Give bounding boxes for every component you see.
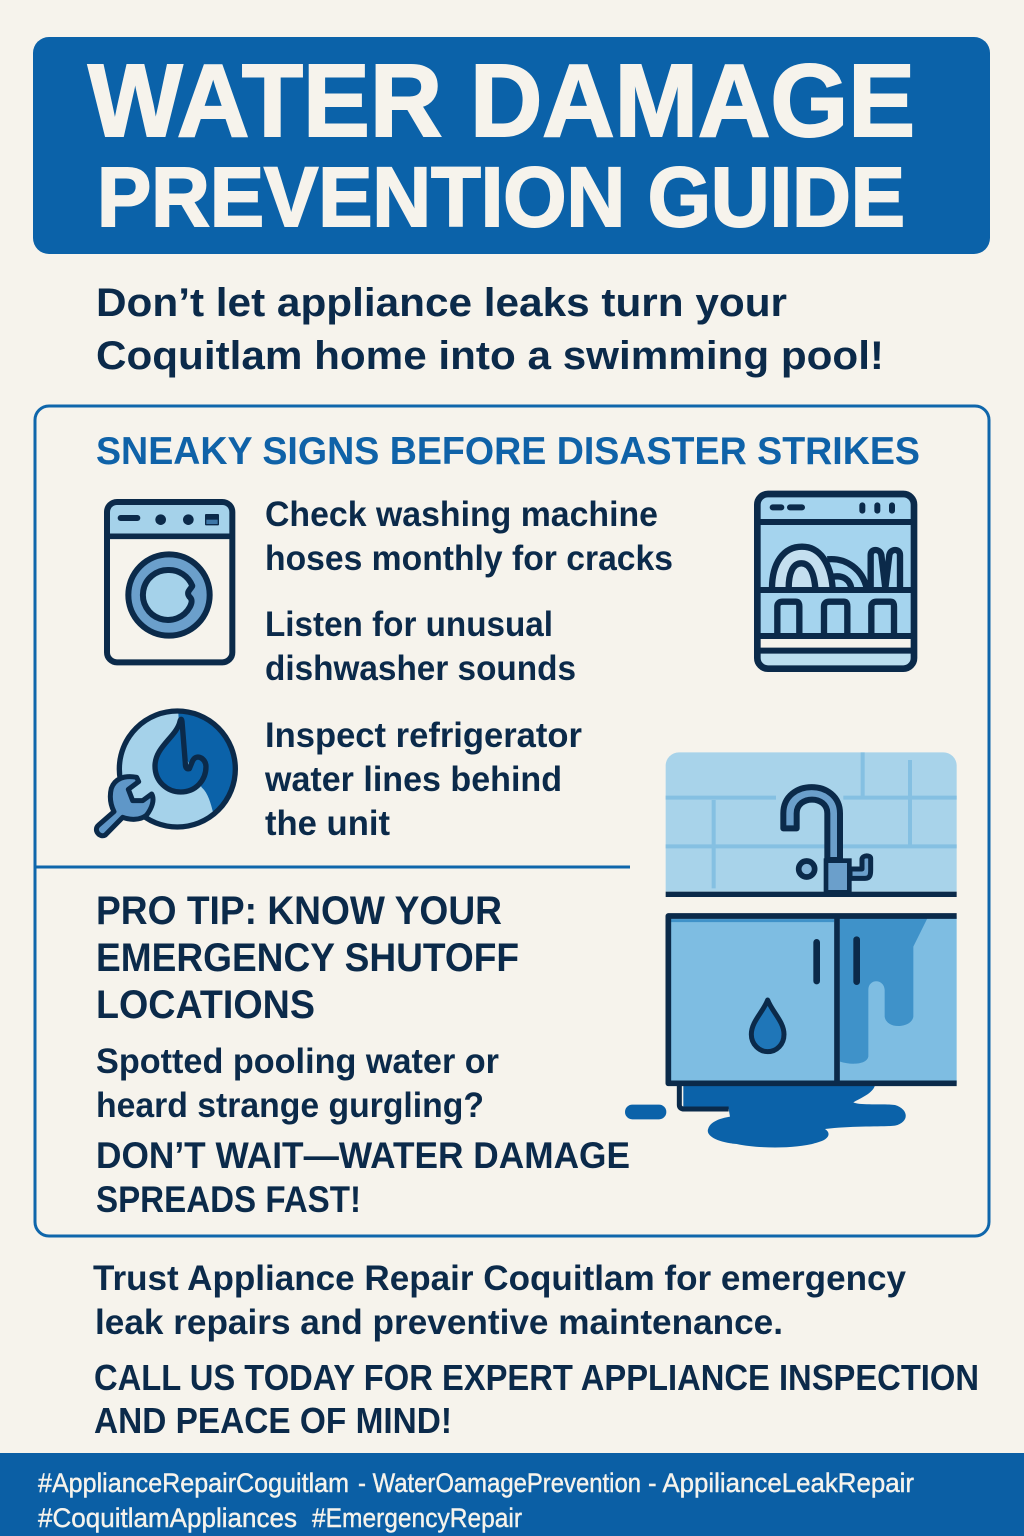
footer hashtags: #CoquitlamAppliances (38, 1503, 297, 1533)
section heading: SNEAKY SIGNS BEFORE DISASTER STRIKES (96, 430, 920, 473)
sign text: washing machine (265, 495, 673, 578)
sign text: washing machine: Check washing machine (265, 495, 658, 534)
cabinet doors (668, 917, 957, 1083)
call to action (94, 1357, 979, 1441)
pro tip body: heard strange gurgling? (96, 1086, 484, 1125)
trust statement: leak repairs and preventive maintenance. (95, 1303, 783, 1342)
icon: washing machine (107, 502, 232, 662)
title line 2: PREVENTION GUIDE (97, 150, 905, 244)
illustration: leaking sink cabinet (625, 752, 957, 1147)
pro tip body: Spotted pooling water or (96, 1042, 499, 1081)
countertop (666, 892, 957, 897)
title line 1: WATER DAMAGE (88, 43, 915, 158)
sign text: refrigerator: the unit (265, 804, 390, 843)
footer hashtags: #EmergencyRepair (312, 1503, 522, 1533)
faucet (783, 787, 871, 892)
subtitle: Coquitlam home into a swimming pool! (96, 334, 884, 378)
icon: dishwasher (757, 494, 914, 669)
subtitle (96, 281, 884, 378)
sign text: refrigerator (264, 716, 582, 843)
pro tip heading: LOCATIONS (96, 983, 315, 1027)
call to action: AND PEACE OF MIND! (94, 1400, 452, 1441)
urgent callout (96, 1135, 630, 1220)
title banner (33, 37, 990, 254)
footer hashtags: #ApplianceRepairCoguitlam (38, 1468, 349, 1498)
sign text: dishwasher: Listen for unusual (265, 605, 553, 644)
backsplash (666, 752, 957, 892)
trust statement (93, 1259, 907, 1342)
icon: leak gauge with wrench (96, 711, 235, 836)
pro tip body (96, 1042, 499, 1125)
urgent callout: DON’T WAIT—WATER DAMAGE (96, 1135, 630, 1176)
panel: signs and pro tip (35, 406, 989, 1236)
footer hashtags: - WaterOamagePrevention (358, 1468, 641, 1498)
sign text: refrigerator: Inspect refrigerator (265, 716, 582, 755)
pro tip heading: EMERGENCY SHUTOFF (96, 936, 519, 980)
sign text: refrigerator: water lines behind (264, 760, 562, 799)
puddle under cabinet (683, 1085, 906, 1147)
pro tip heading: PRO TIP: KNOW YOUR (96, 889, 502, 933)
trust statement: Trust Appliance Repair Coquitlam for emergency (93, 1259, 907, 1298)
pro tip heading (96, 889, 519, 1027)
urgent callout: SPREADS FAST! (96, 1179, 361, 1220)
divider (36, 866, 630, 868)
sign text: dishwasher: dishwasher sounds (265, 649, 576, 688)
footer hashtags: - AppilianceLeakRepair (648, 1468, 914, 1498)
footer hashtags (0, 1453, 1024, 1536)
sign text: washing machine: hoses monthly for cracks (265, 539, 673, 578)
sign text: dishwasher (265, 605, 576, 688)
icon: water drop (751, 1000, 784, 1052)
subtitle: Don’t let appliance leaks turn your (96, 281, 787, 325)
